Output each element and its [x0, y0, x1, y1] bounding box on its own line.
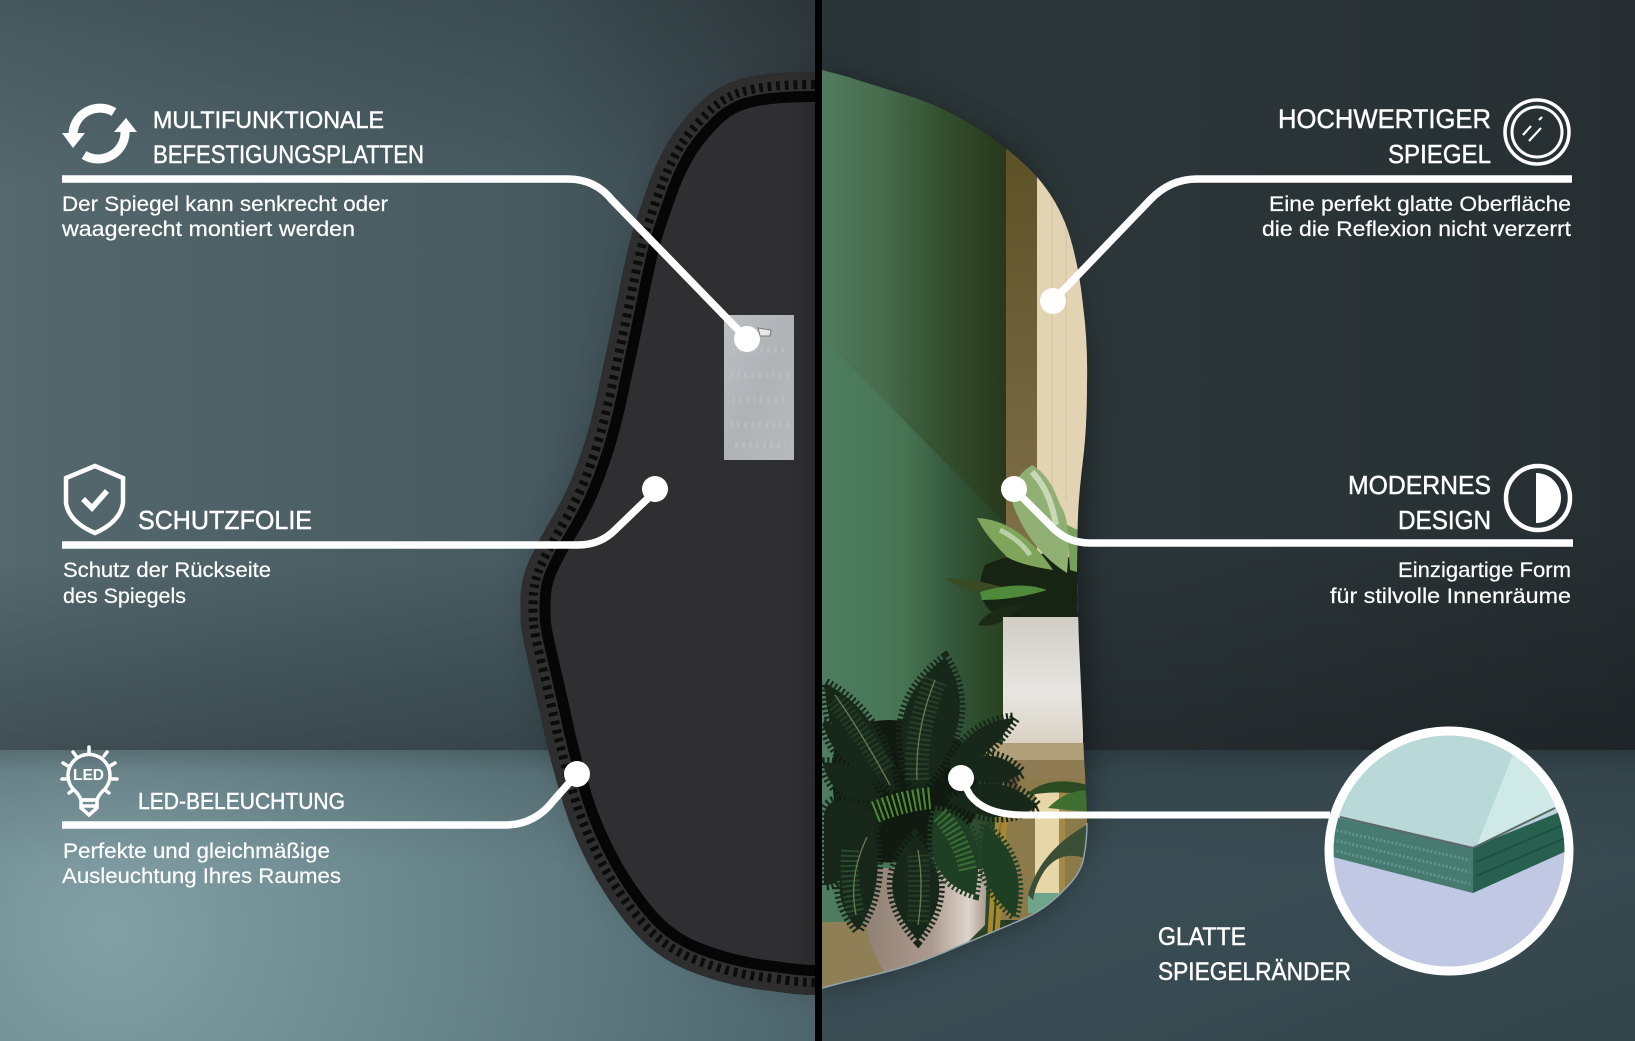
text: led: Ausleuchtung Ihres Raumes	[62, 865, 341, 888]
text: led: Perfekte und gleichmäßige	[63, 840, 330, 863]
icon: rotating arrows	[62, 108, 137, 159]
plant stand	[982, 743, 1088, 933]
wood column	[1006, 148, 1037, 558]
leader line: spiegelraender	[948, 765, 1330, 815]
leader line: befestigungsplatten	[62, 179, 760, 352]
heading: spiegel: SPIEGEL	[1388, 139, 1491, 169]
leader line: schutzfolie	[62, 476, 668, 545]
heading: modernes: MODERNES	[1348, 470, 1491, 500]
leader line: hochwertiger spiegel	[1040, 179, 1572, 314]
text: montage: waagerecht montiert werden	[61, 218, 355, 241]
mounting plate	[724, 315, 794, 460]
text: form	[1330, 559, 1571, 608]
heading: glatte: GLATTE	[1158, 923, 1246, 951]
lighter diagonal wall section	[859, 376, 1005, 930]
white pot	[1003, 617, 1083, 745]
text: oberflaeche: Eine perfekt glatte Oberfläche	[1269, 193, 1571, 216]
heading: multifunktionale: MULTIFUNKTIONALE	[153, 107, 384, 134]
text: montage	[61, 193, 388, 241]
heading: design: DESIGN	[1398, 505, 1491, 535]
background: right wall and floor	[822, 0, 1635, 1041]
palm plant	[823, 658, 1038, 940]
glass edge close-up	[1320, 720, 1580, 980]
heading: spiegelraender: SPIEGELRÄNDER	[1158, 958, 1351, 986]
mirror reflection	[822, 60, 1097, 990]
background: left wall and floor	[0, 0, 815, 1041]
panel with textured frame	[520, 72, 815, 995]
heading: befestigungsplatten: BEFESTIGUNGSPLATTEN	[153, 141, 424, 169]
lens ring	[1329, 731, 1569, 971]
text: oberflaeche: die die Reflexion nicht verzerrt	[1262, 218, 1571, 241]
icon: shield	[66, 466, 123, 533]
lower plant pot	[863, 868, 987, 972]
icon: round mirror	[1505, 100, 1569, 164]
text: schutz: des Spiegels	[63, 585, 186, 608]
lower background	[1000, 770, 1095, 920]
floor	[822, 922, 884, 988]
lens content	[1334, 736, 1564, 966]
text: montage: Der Spiegel kann senkrecht oder	[62, 193, 388, 216]
text: oberflaeche	[1262, 193, 1571, 241]
heading: hochwertiger: HOCHWERTIGER	[1278, 104, 1491, 134]
leader line: led	[62, 761, 590, 825]
text: schutz	[63, 559, 271, 608]
leader line: modernes design	[1001, 476, 1573, 543]
icon: led bulb: LED	[73, 767, 104, 784]
text: form: Einzigartige Form	[1398, 559, 1571, 582]
right leaves	[1028, 781, 1090, 900]
green wall	[822, 60, 1012, 940]
text: schutz: Schutz der Rückseite	[63, 559, 271, 582]
shadow of mirror back	[523, 72, 815, 995]
upper plant	[945, 465, 1080, 626]
mirror back side	[520, 72, 815, 995]
icon: half circle	[1506, 466, 1570, 530]
text: form: für stilvolle Innenräume	[1330, 585, 1571, 608]
heading: led-beleuchtung: LED-BELEUCHTUNG	[138, 788, 345, 814]
centre divider	[815, 0, 822, 1041]
icon: led bulb	[62, 747, 117, 815]
mirror shadow on wall	[822, 72, 1090, 990]
text: led	[62, 840, 341, 888]
mirror edge highlight	[822, 823, 1087, 988]
heading: schutzfolie: SCHUTZFOLIE	[138, 505, 312, 535]
